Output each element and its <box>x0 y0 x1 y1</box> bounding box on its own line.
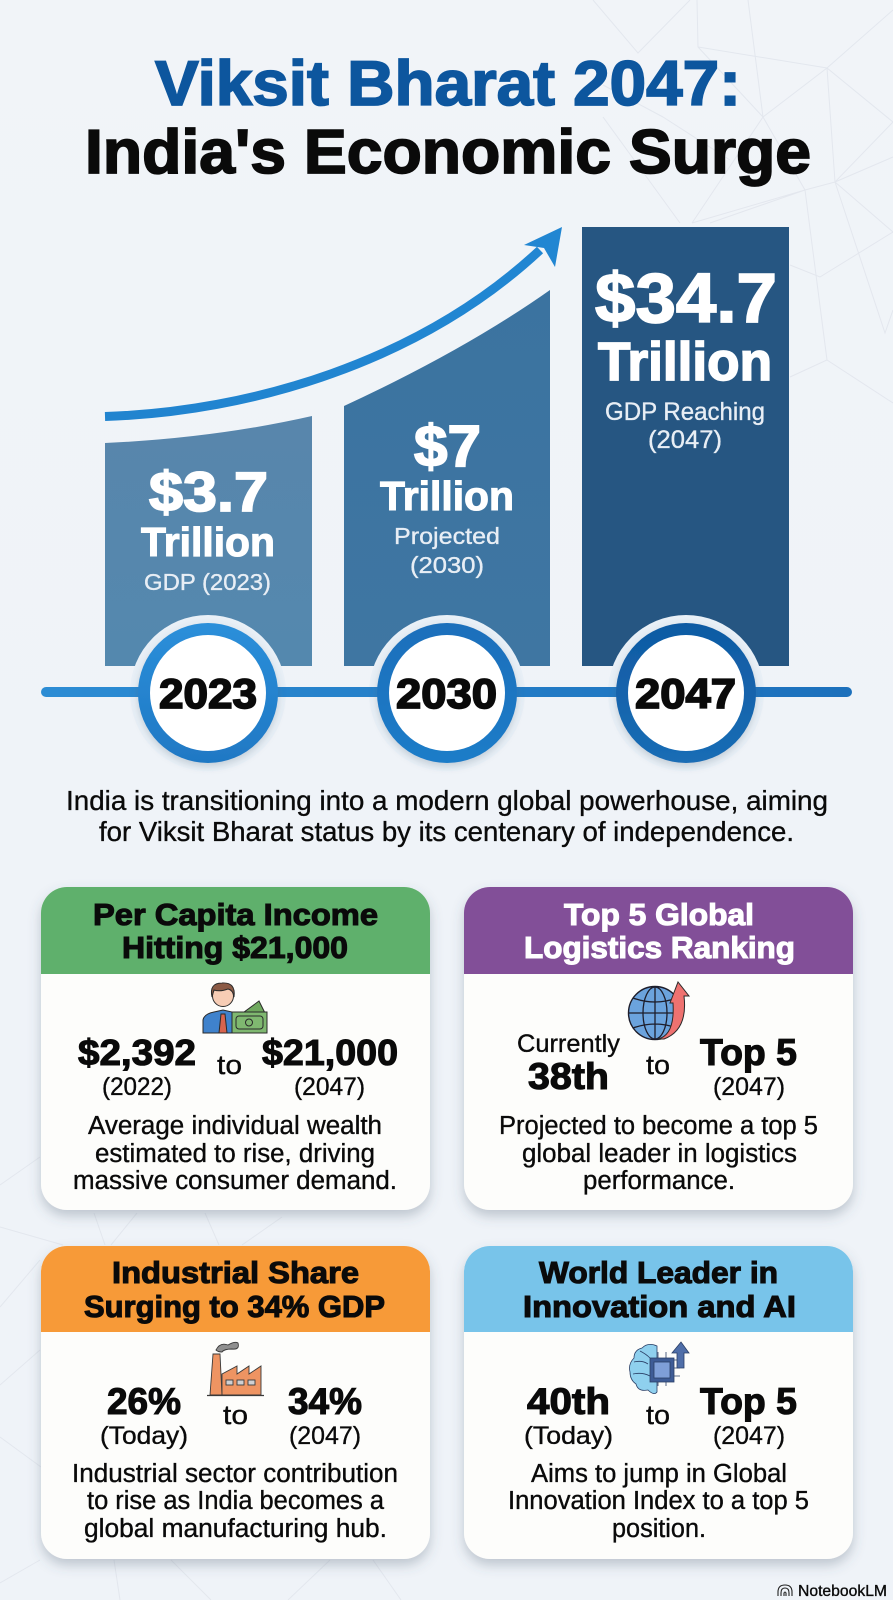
panel header <box>464 1246 853 1332</box>
heading: Top 5 Global <box>564 897 754 932</box>
panel: innovation and AI <box>464 1246 853 1559</box>
comparison figures: Currently <box>517 1030 621 1058</box>
description: to rise as India becomes a <box>87 1487 385 1515</box>
comparison figures: Top 5 <box>700 1032 797 1073</box>
panel: per capita income <box>41 887 430 1210</box>
description: estimated to rise, driving <box>95 1140 375 1168</box>
bar: 2030 <box>344 290 550 666</box>
comparison figures: 34% <box>288 1381 362 1422</box>
comparison figures: (2047) <box>289 1422 361 1450</box>
timeline <box>41 615 852 771</box>
bar: 2047 <box>582 227 789 666</box>
panel: industrial share <box>41 1246 430 1559</box>
description: performance. <box>583 1167 735 1195</box>
heading: Industrial Share <box>112 1255 359 1290</box>
panel header <box>41 887 430 974</box>
description: Average individual wealth <box>88 1112 382 1140</box>
marker: 2047 <box>616 623 756 763</box>
heading: World Leader in <box>539 1255 778 1290</box>
bar: 2030: Trillion <box>380 473 514 519</box>
title line 1: Viksit Bharat 2047: <box>155 49 741 119</box>
heading: Hitting $21,000 <box>122 930 348 965</box>
panel header <box>41 1246 430 1332</box>
marker: 2030: 2030 <box>396 670 497 717</box>
title <box>85 49 811 187</box>
comparison figures: (2047) <box>713 1422 785 1450</box>
marker: 2023 <box>138 623 278 763</box>
description: global leader in logistics <box>522 1140 797 1168</box>
comparison figures <box>100 1381 362 1450</box>
icon: brain chip with arrow <box>630 1342 689 1394</box>
heading: Innovation and AI <box>523 1289 796 1324</box>
description: Projected to become a top 5 <box>499 1112 818 1140</box>
marker: 2047: 2047 <box>635 670 736 717</box>
bar: 2047: GDP Reaching <box>605 398 765 426</box>
description: Industrial sector contribution <box>72 1460 398 1488</box>
panel header <box>464 887 853 974</box>
heading: Surging to 34% GDP <box>84 1289 385 1324</box>
description <box>72 1460 398 1543</box>
heading: Logistics Ranking <box>524 930 795 965</box>
comparison figures: 40th <box>527 1381 610 1422</box>
intro text: for Viksit Bharat status by its centenary of independence. <box>99 816 794 847</box>
heading <box>93 897 378 965</box>
panel: logistics ranking <box>464 887 853 1210</box>
comparison figures: (2022) <box>102 1073 172 1101</box>
bar: 2023: Trillion <box>141 519 275 565</box>
comparison figures: (Today) <box>524 1422 613 1450</box>
bar: 2047: $34.7 <box>595 259 777 337</box>
bar: 2023 <box>105 416 312 666</box>
description: global manufacturing hub. <box>84 1515 387 1543</box>
marker: 2023: 2023 <box>159 670 257 717</box>
bar: 2030: Projected <box>394 523 500 549</box>
bar: 2047: (2047) <box>648 426 722 454</box>
comparison figures: (Today) <box>100 1422 188 1450</box>
comparison figures: 38th <box>528 1056 609 1097</box>
bar: 2023: $3.7 <box>149 460 268 523</box>
description: position. <box>612 1515 706 1543</box>
comparison figures: to <box>223 1400 248 1430</box>
icon: person with money <box>203 983 267 1033</box>
comparison figures: $2,392 <box>78 1032 196 1073</box>
heading <box>523 1255 796 1324</box>
comparison figures: to <box>217 1050 242 1080</box>
chart: GDP growth bars <box>105 227 789 666</box>
heading <box>524 897 795 965</box>
heading: Per Capita Income <box>93 897 378 932</box>
comparison figures <box>78 1032 398 1101</box>
description: Innovation Index to a top 5 <box>508 1487 809 1515</box>
bar: 2030: $7 <box>414 414 481 479</box>
comparison figures: $21,000 <box>262 1032 398 1073</box>
comparison figures: 26% <box>107 1381 181 1422</box>
description <box>73 1112 397 1195</box>
icon: globe with arrow <box>628 982 689 1040</box>
description: massive consumer demand. <box>73 1167 397 1195</box>
bar: 2023: GDP (2023) <box>144 569 271 595</box>
title line 2: India's Economic Surge <box>85 118 811 187</box>
intro text <box>66 785 828 847</box>
comparison figures: to <box>646 1400 670 1430</box>
timeline axis <box>41 687 852 697</box>
marker halos <box>130 615 764 771</box>
marker: 2030 <box>377 623 517 763</box>
intro text: India is transitioning into a modern global powerhouse, aiming <box>66 785 828 816</box>
description: Aims to jump in Global <box>531 1460 787 1488</box>
bar: 2047: Trillion <box>598 332 772 392</box>
heading <box>84 1255 385 1324</box>
description <box>508 1460 809 1543</box>
comparison figures <box>517 1030 797 1101</box>
comparison figures <box>524 1381 797 1450</box>
watermark: NotebookLM: NotebookLM <box>798 1583 887 1600</box>
comparison figures: Top 5 <box>700 1381 797 1422</box>
icon: factory <box>207 1342 264 1396</box>
arrow: growth curve <box>105 227 562 416</box>
comparison figures: to <box>646 1050 670 1080</box>
comparison figures: (2047) <box>713 1073 785 1101</box>
bar: 2030: (2030) <box>410 552 484 578</box>
description <box>499 1112 818 1195</box>
comparison figures: (2047) <box>294 1073 365 1101</box>
